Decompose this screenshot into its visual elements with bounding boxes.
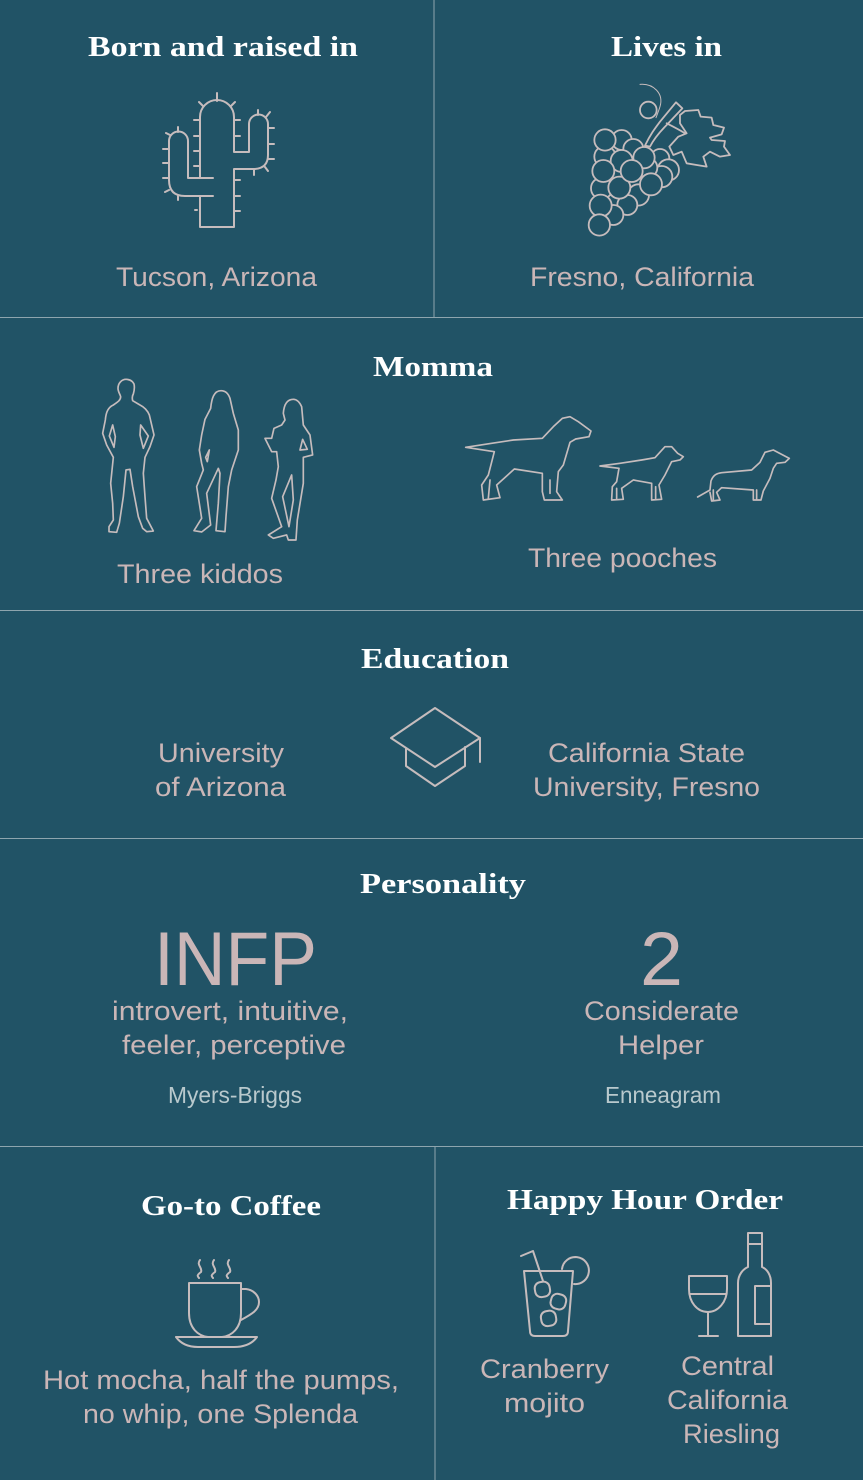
school: California State University, Fresno: California State xyxy=(548,738,745,768)
panel: momma xyxy=(103,351,789,589)
type: 2 Enneagram: 2 xyxy=(640,917,683,1002)
caption: central california riesling: Central xyxy=(681,1351,774,1381)
heading: go-to coffee: Go-to Coffee xyxy=(141,1190,321,1222)
caption: cranberry mojito xyxy=(480,1354,610,1418)
caption: central california riesling: California xyxy=(667,1385,789,1415)
location: Tucson, Arizona: Tucson, Arizona xyxy=(116,262,318,292)
heading: born and raised in: Born and raised in xyxy=(88,31,358,63)
icon: wine glass and bottle xyxy=(689,1233,771,1336)
icon: graduation cap xyxy=(391,708,480,786)
heading: education: Education xyxy=(361,643,509,675)
school: California State University, Fresno: University, Fresno xyxy=(533,772,760,802)
panel: education xyxy=(155,643,760,802)
icon: three kiddos silhouettes xyxy=(103,379,313,540)
location: Fresno, California: Fresno, California xyxy=(530,262,755,292)
panel: go-to coffee xyxy=(43,1190,399,1429)
caption: three kiddos: Three kiddos xyxy=(117,559,283,589)
caption: central california riesling xyxy=(667,1351,789,1449)
panel: happy hour order xyxy=(480,1184,789,1449)
type: 2 Enneagram: Enneagram xyxy=(605,1082,721,1108)
type: INFP Myers-Briggs xyxy=(112,917,348,1108)
order: hot mocha: no whip, one Splenda xyxy=(83,1399,359,1429)
type: 2 Enneagram: Helper xyxy=(618,1030,704,1060)
caption: three pooches: Three pooches xyxy=(528,543,717,573)
type: INFP Myers-Briggs: introvert, intuitive, xyxy=(112,996,348,1026)
school: University of Arizona xyxy=(155,738,287,802)
order: hot mocha: Hot mocha, half the pumps, xyxy=(43,1365,399,1395)
panel: lives in xyxy=(530,31,755,292)
icon: three dogs xyxy=(466,417,789,501)
heading: momma: Momma xyxy=(373,351,494,383)
panel: personality xyxy=(112,868,739,1108)
heading: lives in: Lives in xyxy=(611,31,722,63)
type: INFP Myers-Briggs: INFP xyxy=(154,917,317,1002)
icon: grapes xyxy=(589,84,730,236)
order: hot mocha xyxy=(43,1365,399,1429)
icon: cactus xyxy=(163,93,274,227)
school: California State University, Fresno xyxy=(533,738,760,802)
type: 2 Enneagram xyxy=(584,917,739,1108)
caption: central california riesling: Riesling xyxy=(683,1419,780,1449)
type: 2 Enneagram: Considerate xyxy=(584,996,739,1026)
icon: mojito glass xyxy=(521,1251,589,1336)
school: University of Arizona: University xyxy=(158,738,285,768)
school: University of Arizona: of Arizona xyxy=(155,772,287,802)
type: INFP Myers-Briggs: Myers-Briggs xyxy=(168,1082,302,1108)
heading: personality: Personality xyxy=(360,868,527,900)
caption: cranberry mojito: mojito xyxy=(504,1388,585,1418)
heading: happy hour order: Happy Hour Order xyxy=(507,1184,783,1216)
panel: born and raised xyxy=(88,31,358,292)
icon: coffee cup xyxy=(176,1260,259,1347)
type: INFP Myers-Briggs: feeler, perceptive xyxy=(122,1030,346,1060)
caption: cranberry mojito: Cranberry xyxy=(480,1354,610,1384)
